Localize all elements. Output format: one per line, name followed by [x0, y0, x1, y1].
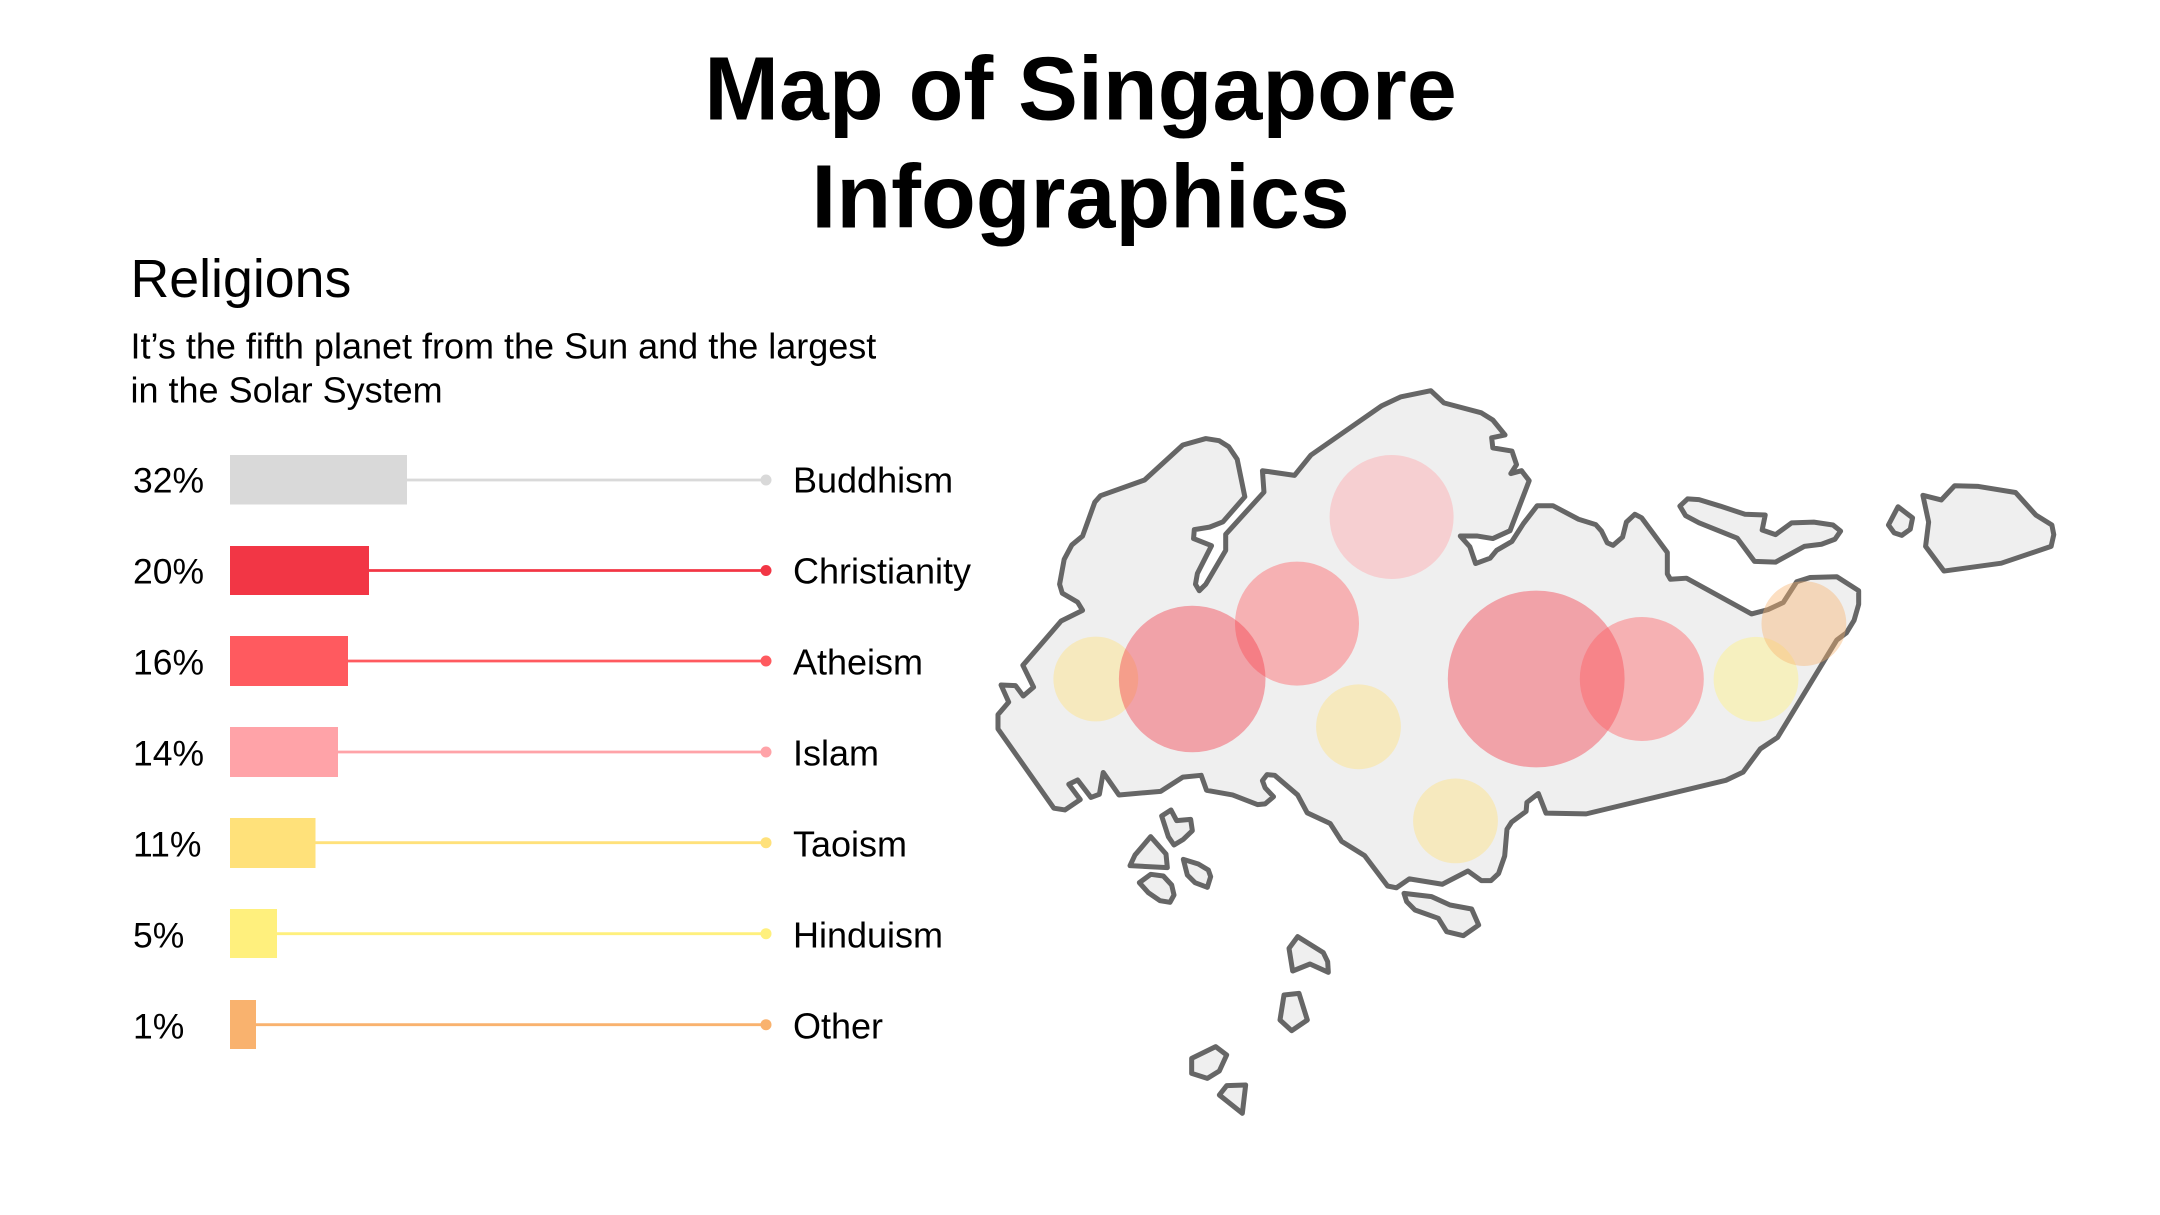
- title: [704, 40, 1457, 248]
- row: Taoism 11%: [133, 818, 907, 868]
- description text: [130, 326, 876, 410]
- map: main island and northeast islands: [998, 391, 2054, 888]
- row: Islam 14%: 14%: [133, 734, 204, 774]
- bar chart: religions: [133, 455, 971, 1049]
- row: Hinduism 5%: 5%: [133, 916, 184, 956]
- row: Atheism 16%: 16%: [133, 642, 204, 682]
- row: Taoism 11%: 11%: [133, 824, 201, 864]
- title: Infographics: [811, 148, 1350, 248]
- description text: It’s the fifth planet from the Sun and the largest: [130, 326, 876, 366]
- row: Islam 14%: Islam: [793, 732, 879, 774]
- row: Other 1%: Other: [793, 1006, 883, 1046]
- row: Buddhism 32%: Buddhism: [793, 460, 953, 500]
- row: Buddhism 32%: 32%: [133, 460, 204, 500]
- row: Atheism 16%: Atheism: [793, 642, 923, 682]
- map of Singapore: [998, 391, 2054, 1113]
- description text: in the Solar System: [130, 370, 443, 410]
- row: Buddhism 32%: [133, 455, 953, 504]
- heading: religions: Religions: [130, 249, 351, 309]
- title: Map of Singapore: [704, 40, 1457, 140]
- row: Christianity 20%: Christianity: [793, 550, 971, 592]
- row: Atheism 16%: [133, 636, 923, 686]
- row: Hinduism 5%: [133, 909, 943, 958]
- row: Hinduism 5%: Hinduism: [793, 914, 943, 956]
- row: Christianity 20%: [133, 546, 971, 595]
- row: Christianity 20%: 20%: [133, 552, 204, 592]
- map: data circles: [1053, 455, 1846, 863]
- row: Taoism 11%: Taoism: [793, 824, 907, 864]
- map: southern islands: [1130, 810, 1479, 1113]
- row: Other 1%: 1%: [133, 1006, 184, 1046]
- row: Other 1%: [133, 1000, 883, 1049]
- row: Islam 14%: [133, 727, 879, 777]
